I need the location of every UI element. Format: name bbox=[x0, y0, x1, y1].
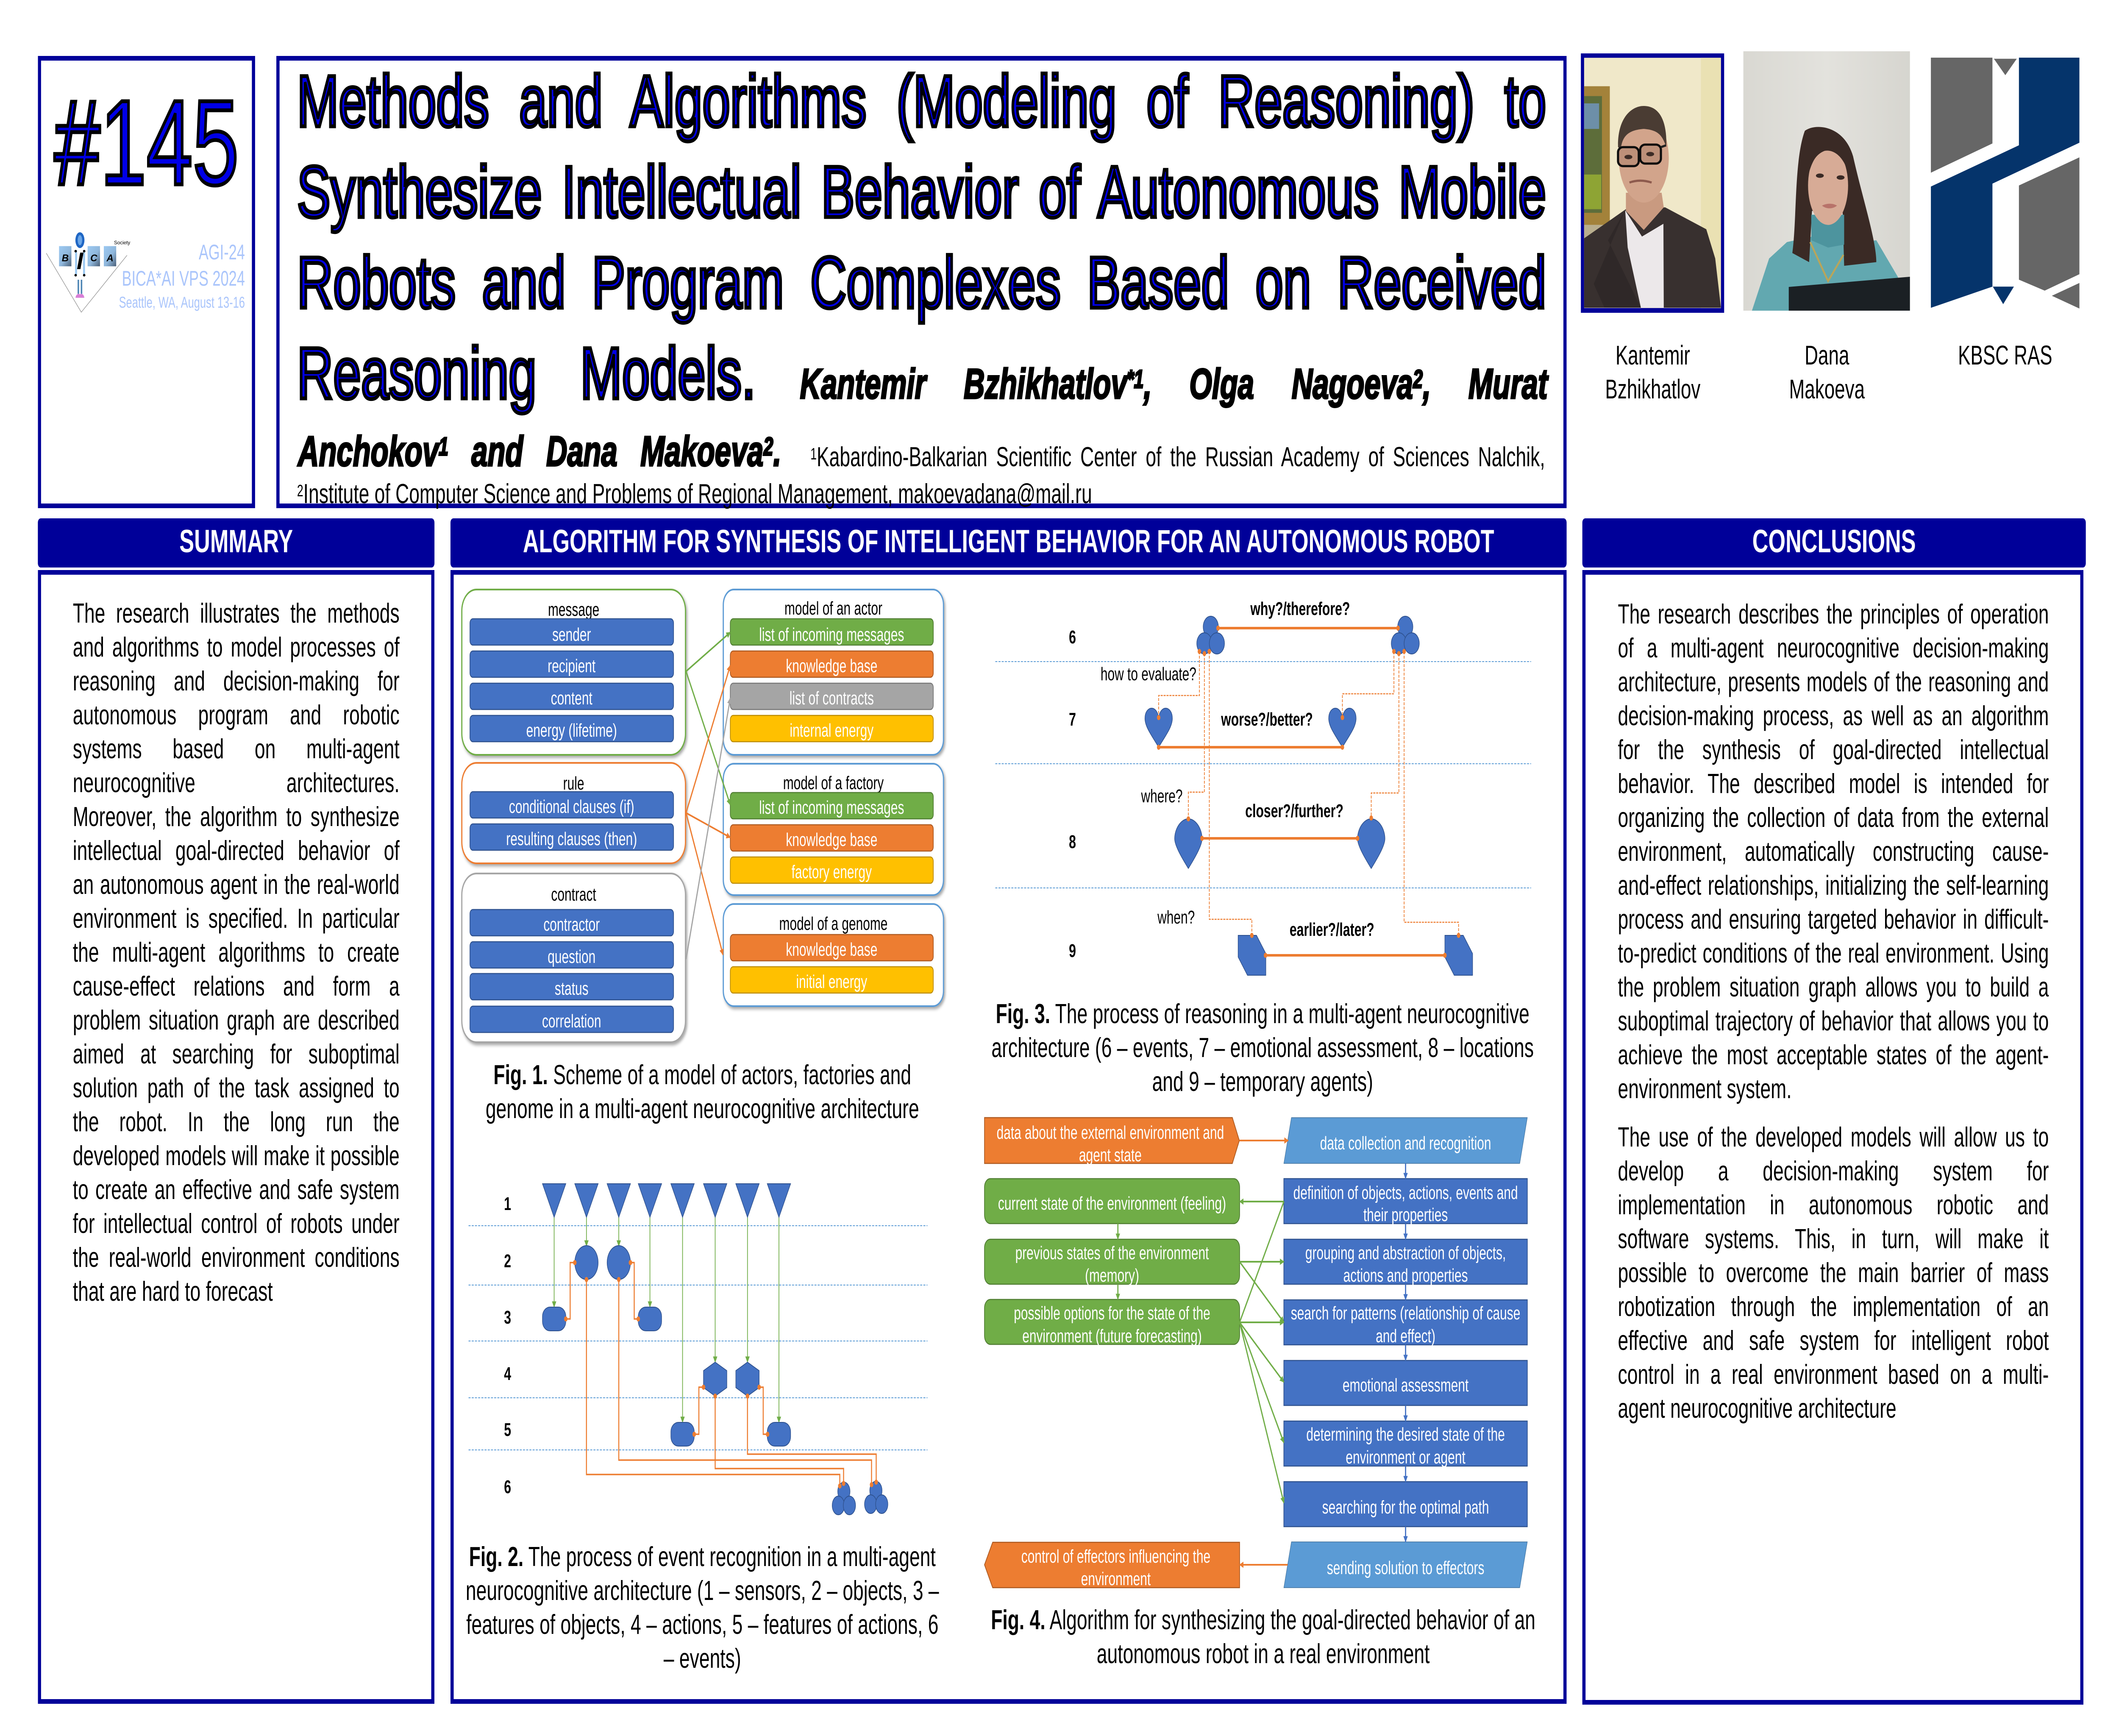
second affiliation: 2Institute of Computer Science and Problems of Regional Management, makoevadana@mail.ru bbox=[297, 478, 1092, 509]
box: model of an actor: list of contracts bbox=[790, 687, 874, 708]
box: model of a factory: knowledge base bbox=[786, 829, 877, 850]
box: model of an actor bbox=[723, 590, 943, 755]
connections bbox=[1157, 626, 1460, 958]
box: message: message bbox=[548, 599, 599, 620]
step: desired state bbox=[1284, 1421, 1527, 1467]
step: optimal path bbox=[1284, 1482, 1527, 1527]
box: rule: resulting clauses (then) bbox=[506, 828, 637, 849]
box: contract: contract bbox=[551, 884, 596, 904]
box: model of a factory: list of incoming messages bbox=[759, 797, 904, 818]
level numbers: 8 bbox=[1069, 831, 1076, 852]
step: definition of objects: definition of objects, actions, events and bbox=[1293, 1182, 1518, 1203]
summary text: an autonomous agent in the real-world bbox=[73, 869, 400, 900]
box: contract: question bbox=[548, 946, 595, 967]
output: control of effectors bbox=[984, 1542, 1240, 1589]
icon: BICA society logo: B bbox=[62, 252, 69, 264]
step: sending solution bbox=[1284, 1542, 1527, 1588]
panel: title and authors bbox=[276, 56, 1567, 508]
flow arrows bbox=[1118, 1141, 1406, 1565]
green sensor connections bbox=[554, 1217, 779, 1422]
state: current: current state of the environment (feeling) bbox=[998, 1193, 1226, 1213]
state: possible: possible options for the state of the bbox=[1014, 1302, 1210, 1323]
caption: figure 1 bbox=[455, 1058, 950, 1126]
box: rule bbox=[462, 763, 685, 863]
step: emotional assessment: emotional assessment bbox=[1343, 1374, 1469, 1395]
location agents: drops bbox=[1175, 819, 1385, 868]
summary text: to create an effective and safe system bbox=[73, 1174, 400, 1205]
summary text: autonomous program and robotic bbox=[73, 699, 400, 730]
conclusions second paragraph: software systems. This, in turn, will make it bbox=[1618, 1223, 2049, 1254]
summary text: and algorithms to model processes of bbox=[73, 632, 400, 662]
events bbox=[832, 1481, 888, 1515]
box: model of a genome bbox=[723, 904, 943, 1006]
summary text: the robot. In the long run the bbox=[73, 1106, 400, 1137]
step: search for patterns: and effect) bbox=[1376, 1325, 1435, 1346]
output: control of effectors: control of effectors influencing the bbox=[1021, 1546, 1210, 1566]
title: Robots and Program Complexes Based on Received bbox=[297, 242, 1546, 323]
heading: conclusions bbox=[1582, 518, 2086, 568]
conclusions first paragraph: The research describes the principles of operation bbox=[1618, 598, 2049, 629]
caption: figure 2: features of objects, 4 – actions, 5 – features of actions, 6 bbox=[466, 1609, 938, 1640]
state: previous: previous states of the environment bbox=[1015, 1242, 1209, 1263]
step: definition of objects bbox=[1284, 1179, 1527, 1225]
summary text: cause-effect relations and form a bbox=[73, 971, 400, 1002]
question labels bbox=[1101, 598, 1374, 940]
state: possible: environment (future forecasting) bbox=[1022, 1325, 1202, 1346]
step: optimal path: searching for the optimal path bbox=[1322, 1497, 1489, 1517]
conclusions first paragraph: decision-making process, as well as an algorithm bbox=[1618, 700, 2049, 731]
step: search for patterns bbox=[1284, 1300, 1527, 1346]
box: message: recipient bbox=[548, 655, 596, 676]
step: grouping: actions and properties bbox=[1343, 1265, 1468, 1285]
input: external data bbox=[984, 1118, 1239, 1165]
icon: BICA society logo: Society bbox=[114, 240, 130, 246]
step: definition of objects: their properties bbox=[1363, 1204, 1448, 1225]
level numbers: 4 bbox=[504, 1363, 511, 1384]
level numbers bbox=[504, 1193, 511, 1497]
heading: summary: SUMMARY bbox=[179, 523, 293, 559]
orange connections bbox=[564, 1260, 878, 1488]
box: model of an actor: internal energy bbox=[790, 720, 873, 740]
caption: Dana Makoeva: Makoeva bbox=[1789, 374, 1865, 404]
panel: algorithm figures bbox=[450, 570, 1567, 1704]
conclusions second paragraph: effective and safe system for intelligent robot bbox=[1618, 1325, 2049, 1356]
caption: Dana Makoeva bbox=[1740, 338, 1914, 406]
conference place and date: Seattle, WA, August 13-16 bbox=[119, 294, 245, 311]
box: model of an actor: model of an actor bbox=[784, 598, 882, 618]
conclusions second paragraph: agent neurocognitive architecture bbox=[1618, 1393, 1897, 1424]
conclusions second paragraph: implementation in autonomous robotic and bbox=[1618, 1189, 2049, 1220]
summary text: problem situation graph are described bbox=[73, 1004, 400, 1035]
conclusions second paragraph: robotization through the implementation of an bbox=[1618, 1291, 2049, 1322]
title: Reasoning Models. bbox=[297, 333, 756, 414]
panel: poster number and conference bbox=[38, 56, 255, 508]
conclusions second paragraph: develop a decision-making system for bbox=[1618, 1155, 2049, 1186]
caption: figure 4: Fig. 4. Algorithm for synthesizing the goal-directed behavior of an bbox=[991, 1604, 1535, 1635]
step: grouping bbox=[1284, 1239, 1527, 1285]
photo: Dana Makoeva bbox=[1744, 51, 1910, 311]
summary text: Moreover, the algorithm to synthesize bbox=[73, 801, 400, 832]
event agents bbox=[1197, 616, 1419, 654]
question labels: earlier?/later? bbox=[1290, 919, 1374, 940]
summary text: neurocognitive architectures. bbox=[73, 767, 400, 798]
box: model of a factory bbox=[723, 764, 943, 895]
box: contract: correlation bbox=[542, 1010, 601, 1031]
level numbers: 9 bbox=[1069, 940, 1076, 961]
conclusions second paragraph: possible to overcome the main barrier of mass bbox=[1618, 1257, 2049, 1288]
figure 1: scheme of models bbox=[457, 585, 949, 1051]
caption: figure 3: and 9 – temporary agents) bbox=[1152, 1066, 1373, 1097]
state: possible bbox=[984, 1299, 1240, 1346]
step: data collection: data collection and recognition bbox=[1320, 1132, 1491, 1153]
conclusions first paragraph: for the synthesis of goal-directed intellectual bbox=[1618, 734, 2049, 765]
question labels: why?/therefore? bbox=[1250, 598, 1350, 619]
summary text: systems based on multi-agent bbox=[73, 733, 400, 764]
authors second line: Anchokov1 and Dana Makoeva2. bbox=[298, 428, 781, 475]
conclusions first paragraph: organizing the collection of data from the external bbox=[1618, 802, 2049, 833]
title: Methods and Algorithms (Modeling of Reasoning) to bbox=[297, 61, 1546, 142]
step: desired state: environment or agent bbox=[1346, 1447, 1466, 1467]
caption: figure 1: genome in a multi-agent neurocognitive architecture bbox=[486, 1093, 919, 1124]
input: external data: agent state bbox=[1079, 1144, 1142, 1165]
summary text: for intellectual control of robots under bbox=[73, 1208, 400, 1239]
features of objects bbox=[542, 1307, 662, 1331]
step: data collection bbox=[1284, 1118, 1527, 1163]
step: emotional assessment bbox=[1284, 1360, 1527, 1405]
conclusions second paragraph: The use of the developed models will allow us to bbox=[1618, 1121, 2049, 1152]
caption: Dana Makoeva: Dana bbox=[1805, 340, 1849, 370]
state: previous bbox=[984, 1239, 1240, 1285]
title: Synthesize Intellectual Behavior of Autonomous Mobile bbox=[297, 151, 1546, 233]
box: model of an actor: knowledge base bbox=[786, 655, 877, 676]
summary text: developed models will make it possible bbox=[73, 1140, 400, 1171]
summary text: that are hard to forecast bbox=[73, 1276, 273, 1307]
step: sending solution: sending solution to effectors bbox=[1327, 1557, 1484, 1578]
figure 2: event recognition bbox=[466, 1178, 932, 1517]
arrows between models bbox=[686, 632, 730, 959]
input: external data: data about the external environment and bbox=[997, 1122, 1224, 1143]
conclusions first paragraph: behavior. The described model is intended for bbox=[1618, 768, 2049, 799]
icon: BICA society logo: I bbox=[77, 247, 84, 274]
caption: figure 3: architecture (6 – events, 7 – emotional assessment, 8 – locations bbox=[991, 1032, 1534, 1063]
caption: figure 3 bbox=[971, 997, 1554, 1099]
actions bbox=[704, 1362, 759, 1396]
box: message bbox=[462, 590, 685, 755]
question labels: when? bbox=[1157, 907, 1195, 927]
caption: figure 1: Fig. 1. Scheme of a model of actors, factories and bbox=[493, 1059, 911, 1090]
conclusions first paragraph: of a multi-agent neurocognitive decision-making bbox=[1618, 632, 2049, 663]
level separators bbox=[469, 1226, 927, 1450]
caption: figure 4 bbox=[972, 1603, 1554, 1671]
output: control of effectors: environment bbox=[1081, 1568, 1151, 1589]
step: search for patterns: search for patterns (relationship of cause bbox=[1291, 1302, 1520, 1323]
icon: KBSC RAS logo bbox=[1931, 58, 2080, 309]
box: contract: status bbox=[555, 978, 589, 999]
conclusions first paragraph: suboptimal trajectory of behavior that allows you to bbox=[1618, 1005, 2049, 1036]
conclusions first paragraph: the problem situation graph allows you to build a bbox=[1618, 971, 2049, 1002]
question labels: closer?/further? bbox=[1245, 800, 1343, 821]
heading: algorithm bbox=[450, 518, 1567, 568]
conclusions first paragraph: environment system. bbox=[1618, 1073, 1792, 1104]
conclusions first paragraph bbox=[1618, 597, 2049, 1106]
caption: figure 2: – events) bbox=[664, 1643, 741, 1674]
heading: conclusions: CONCLUSIONS bbox=[1752, 523, 1916, 559]
question labels: worse?/better? bbox=[1221, 709, 1313, 729]
conclusions first paragraph: to-predict conditions of the real environment. Using bbox=[1618, 938, 2049, 968]
panel: summary bbox=[38, 570, 434, 1704]
conclusions first paragraph: achieve the most acceptable states of the agent- bbox=[1618, 1039, 2049, 1070]
conclusions first paragraph: process and ensuring targeted behavior in difficult- bbox=[1618, 904, 2049, 935]
level separators bbox=[995, 662, 1531, 888]
box: model of a genome: initial energy bbox=[796, 971, 868, 992]
poster number: #145 bbox=[54, 75, 239, 210]
caption: figure 4: autonomous robot in a real environment bbox=[1097, 1638, 1429, 1669]
box: rule: conditional clauses (if) bbox=[509, 796, 634, 817]
caption: figure 2: neurocognitive architecture (1 – sensors, 2 – objects, 3 – bbox=[466, 1575, 939, 1606]
level numbers: 1 bbox=[504, 1193, 511, 1214]
objects bbox=[575, 1246, 631, 1280]
box: model of a genome: model of a genome bbox=[779, 913, 887, 934]
box: model of an actor: list of incoming messages bbox=[759, 624, 904, 645]
conclusions second paragraph: control in a real environment based on a multi- bbox=[1618, 1359, 2049, 1390]
icon: BICA society logo bbox=[41, 220, 175, 322]
summary text bbox=[73, 596, 400, 1308]
question labels: where? bbox=[1141, 785, 1183, 806]
step: desired state: determining the desired state of the bbox=[1306, 1424, 1505, 1444]
summary text: the real-world environment conditions bbox=[73, 1242, 400, 1273]
conclusions first paragraph: architecture, presents models of the reasoning and bbox=[1618, 666, 2049, 697]
box: message: content bbox=[551, 687, 592, 708]
caption: figure 2 bbox=[455, 1540, 950, 1675]
box: model of a factory: model of a factory bbox=[783, 772, 884, 793]
box: message: sender bbox=[552, 624, 591, 645]
level numbers: 2 bbox=[504, 1250, 511, 1271]
state: current bbox=[984, 1179, 1240, 1224]
conclusions first paragraph: and-effect relationships, initializing the self-learning bbox=[1618, 870, 2049, 901]
question labels: how to evaluate? bbox=[1101, 663, 1196, 684]
step: grouping: grouping and abstraction of objects, bbox=[1305, 1242, 1506, 1263]
authors first line: Kantemir Bzhikhatlov*1, Olga Nagoeva2, Murat bbox=[800, 360, 1548, 408]
box: model of a factory: factory energy bbox=[792, 861, 872, 882]
summary text: The research illustrates the methods bbox=[73, 598, 400, 629]
box: contract bbox=[462, 874, 685, 1042]
level numbers: 3 bbox=[504, 1307, 511, 1327]
icon: BICA society logo: A bbox=[106, 252, 114, 264]
conclusions second paragraph bbox=[1618, 1120, 2049, 1425]
heading: algorithm: ALGORITHM FOR SYNTHESIS OF INTELLIGENT BEHAVIOR FOR AN AUTONOMOUS ROBOT bbox=[523, 523, 1494, 559]
caption: figure 3: Fig. 3. The process of reasoning in a multi-agent neurocognitive bbox=[996, 998, 1529, 1029]
sensors bbox=[542, 1184, 790, 1217]
caption: Kantemir Bzhikhatlov: Kantemir bbox=[1616, 340, 1690, 370]
summary text: intellectual goal-directed behavior of bbox=[73, 835, 400, 866]
state: previous: (memory) bbox=[1085, 1265, 1139, 1285]
caption: figure 2: Fig. 2. The process of event recognition in a multi-agent bbox=[469, 1541, 936, 1572]
emotional agents: hearts bbox=[1145, 708, 1356, 747]
first affiliation: 1Kabardino-Balkarian Scientific Center of the Russian Academy of Sciences Nalchik, bbox=[810, 441, 1545, 472]
summary text: the multi-agent algorithms to create bbox=[73, 937, 400, 968]
conclusions first paragraph: environment, automatically constructing cause- bbox=[1618, 836, 2049, 867]
panel: conclusions bbox=[1582, 570, 2083, 1705]
figure 3: process of reasoning bbox=[993, 593, 1535, 979]
level numbers bbox=[1069, 626, 1076, 961]
summary text: solution path of the task assigned to bbox=[73, 1072, 400, 1103]
level numbers: 6 bbox=[504, 1476, 511, 1497]
temporal agents bbox=[1238, 935, 1473, 975]
heading: summary bbox=[38, 518, 434, 568]
box: model of a genome: knowledge base bbox=[786, 939, 877, 960]
summary text: reasoning and decision-making for bbox=[73, 665, 400, 696]
level numbers: 6 bbox=[1069, 626, 1076, 647]
caption: KBSC RAS: KBSC RAS bbox=[1958, 340, 2052, 370]
title bbox=[297, 56, 1546, 419]
figure 4: algorithm flowchart bbox=[982, 1113, 1532, 1591]
level numbers: 5 bbox=[504, 1419, 511, 1440]
features of actions bbox=[671, 1422, 790, 1446]
photo: Kantemir Bzhikhatlov bbox=[1581, 53, 1724, 313]
summary text: aimed at searching for suboptimal bbox=[73, 1038, 400, 1069]
caption: Kantemir Bzhikhatlov: Bzhikhatlov bbox=[1605, 374, 1700, 404]
caption: Kantemir Bzhikhatlov bbox=[1566, 338, 1740, 406]
box: rule: rule bbox=[563, 773, 584, 793]
conference event: BICA*AI VPS 2024 bbox=[122, 267, 245, 290]
conference name: AGI-24 bbox=[199, 240, 245, 264]
icon: BICA society logo: C bbox=[90, 252, 97, 264]
box: message: energy (lifetime) bbox=[526, 720, 617, 740]
box: contract: contractor bbox=[543, 914, 600, 935]
summary text: environment is specified. In particular bbox=[73, 903, 400, 934]
level numbers: 7 bbox=[1069, 709, 1076, 729]
